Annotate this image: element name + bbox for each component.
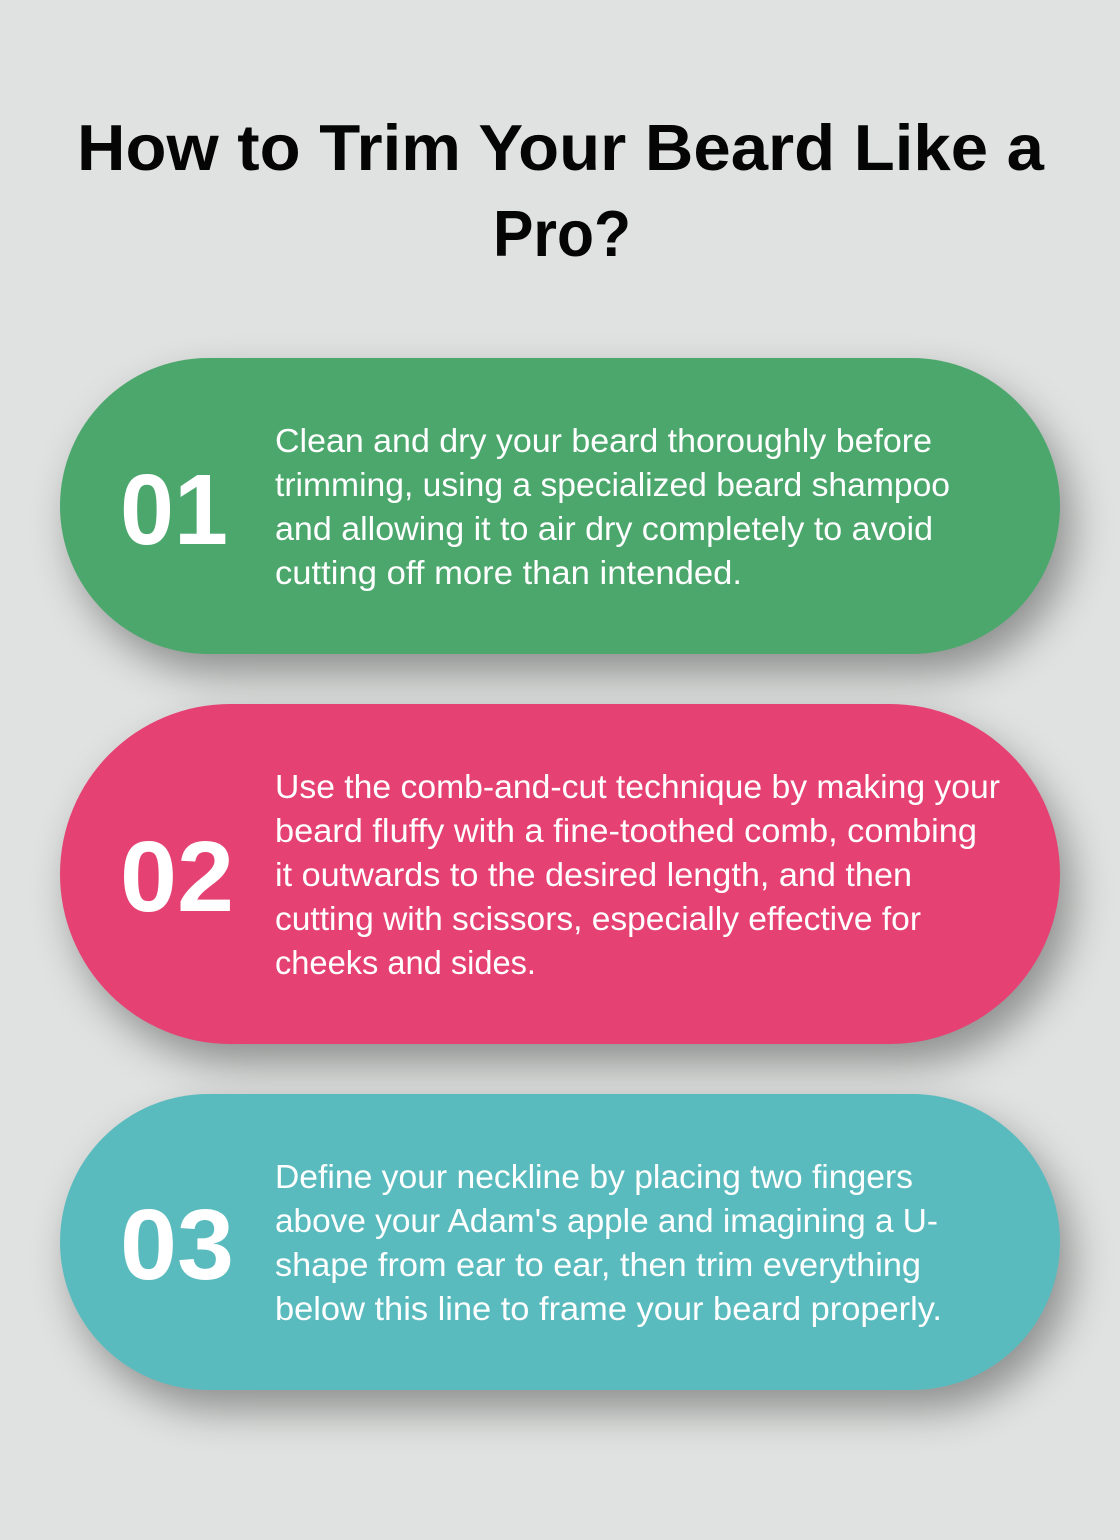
step 01 text: trimming, using a specialized beard shampoo (275, 466, 950, 503)
step 01 text: cutting off more than intended. (275, 554, 742, 591)
step 03 text: below this line to frame your beard properly. (275, 1290, 942, 1327)
step 01 text: and allowing it to air dry completely to avoid (275, 510, 933, 547)
step number 02: 02 (120, 821, 234, 933)
green pill card (60, 358, 1060, 654)
step 02 text: it outwards to the desired length, and then (275, 856, 912, 893)
panel: step 01 (60, 358, 1060, 654)
step 02 text: beard fluffy with a fine-toothed comb, combing (275, 812, 977, 849)
step 03 text: Define your neckline by placing two fingers (275, 1158, 913, 1195)
step number 01: 01 (120, 454, 228, 566)
title (77, 111, 1045, 270)
title: Pro? (493, 197, 631, 270)
step 01 text: Clean and dry your beard thoroughly before (275, 422, 932, 459)
step 02 text: Use the comb-and-cut technique by making your (275, 768, 1000, 805)
teal pill card (60, 1094, 1060, 1390)
title: How to Trim Your Beard Like a (77, 111, 1045, 184)
step 03 text: above your Adam's apple and imagining a U- (275, 1202, 938, 1239)
step 02 text: cheeks and sides. (275, 944, 536, 981)
step 02 text (275, 768, 1000, 981)
panel: step 03 (60, 1094, 1060, 1390)
panel: step 02 (60, 704, 1060, 1044)
step number 03: 03 (120, 1189, 234, 1301)
step 02 text: cutting with scissors, especially effective for (275, 900, 921, 937)
step 03 text (275, 1158, 942, 1327)
step 03 text: shape from ear to ear, then trim everything (275, 1246, 921, 1283)
pink pill card (60, 704, 1060, 1044)
step 01 text (275, 422, 950, 591)
